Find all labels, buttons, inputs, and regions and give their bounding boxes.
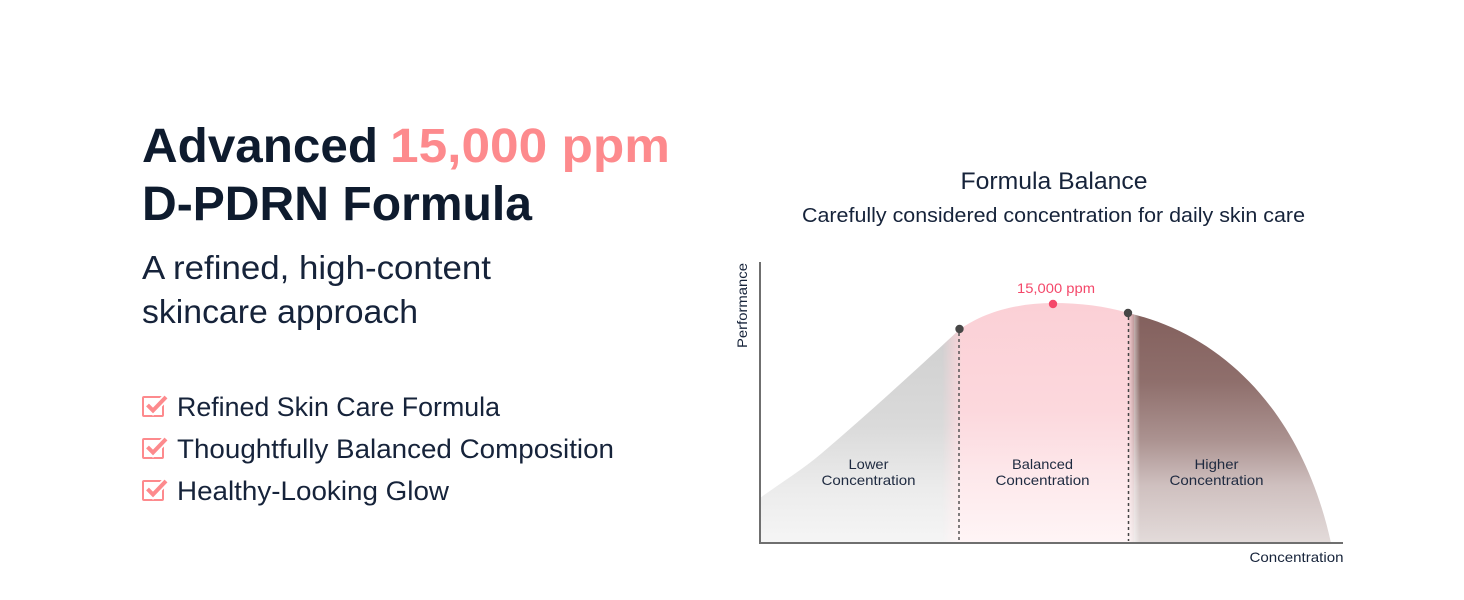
title: 15,000 ppm [390, 120, 670, 173]
chart heading: Carefully considered concentration for daily skin care [802, 205, 1305, 227]
label: lower concentration [822, 456, 916, 488]
divider: higher boundary [1128, 317, 1130, 541]
chart heading: Formula Balance [960, 168, 1148, 195]
title: Advanced [142, 120, 378, 173]
label: lower concentration: Concentration [822, 472, 916, 488]
label: balanced concentration: Balanced [1012, 456, 1073, 472]
marker: 15,000 ppm [1049, 300, 1057, 308]
zone: lower concentration [760, 320, 965, 544]
label: 15,000 ppm: 15,000 ppm [1017, 280, 1095, 296]
checklist [143, 392, 614, 506]
title: D-PDRN Formula [142, 178, 532, 231]
label: lower concentration: Lower [848, 456, 889, 472]
axes [760, 262, 1343, 543]
item: Refined Skin Care Formula: Refined Skin Care Formula [177, 392, 501, 422]
item: Healthy-Looking Glow: Healthy-Looking Glow [177, 476, 450, 506]
marker: lower point [955, 325, 964, 333]
label: y axis: Performance [734, 263, 750, 348]
label: higher concentration [1170, 456, 1264, 488]
chart: formula balance curve [734, 262, 1344, 565]
label: balanced concentration [996, 456, 1090, 488]
chart heading [802, 168, 1305, 227]
label: x axis: Concentration [1250, 549, 1344, 565]
zone: higher concentration [1129, 314, 1331, 542]
item: Thoughtfully Balanced Composition: Thoughtfully Balanced Composition [177, 434, 614, 464]
divider: lower boundary [958, 333, 960, 541]
subtitle [142, 249, 491, 330]
marker: higher point [1124, 309, 1132, 317]
subtitle: skincare approach [142, 293, 418, 330]
label: higher concentration: Higher [1194, 456, 1239, 472]
subtitle: A refined, high-content [142, 249, 491, 286]
zone: balanced concentration [942, 295, 1134, 544]
title [142, 120, 670, 231]
label: balanced concentration: Concentration [996, 472, 1090, 488]
label: higher concentration: Concentration [1170, 472, 1264, 488]
